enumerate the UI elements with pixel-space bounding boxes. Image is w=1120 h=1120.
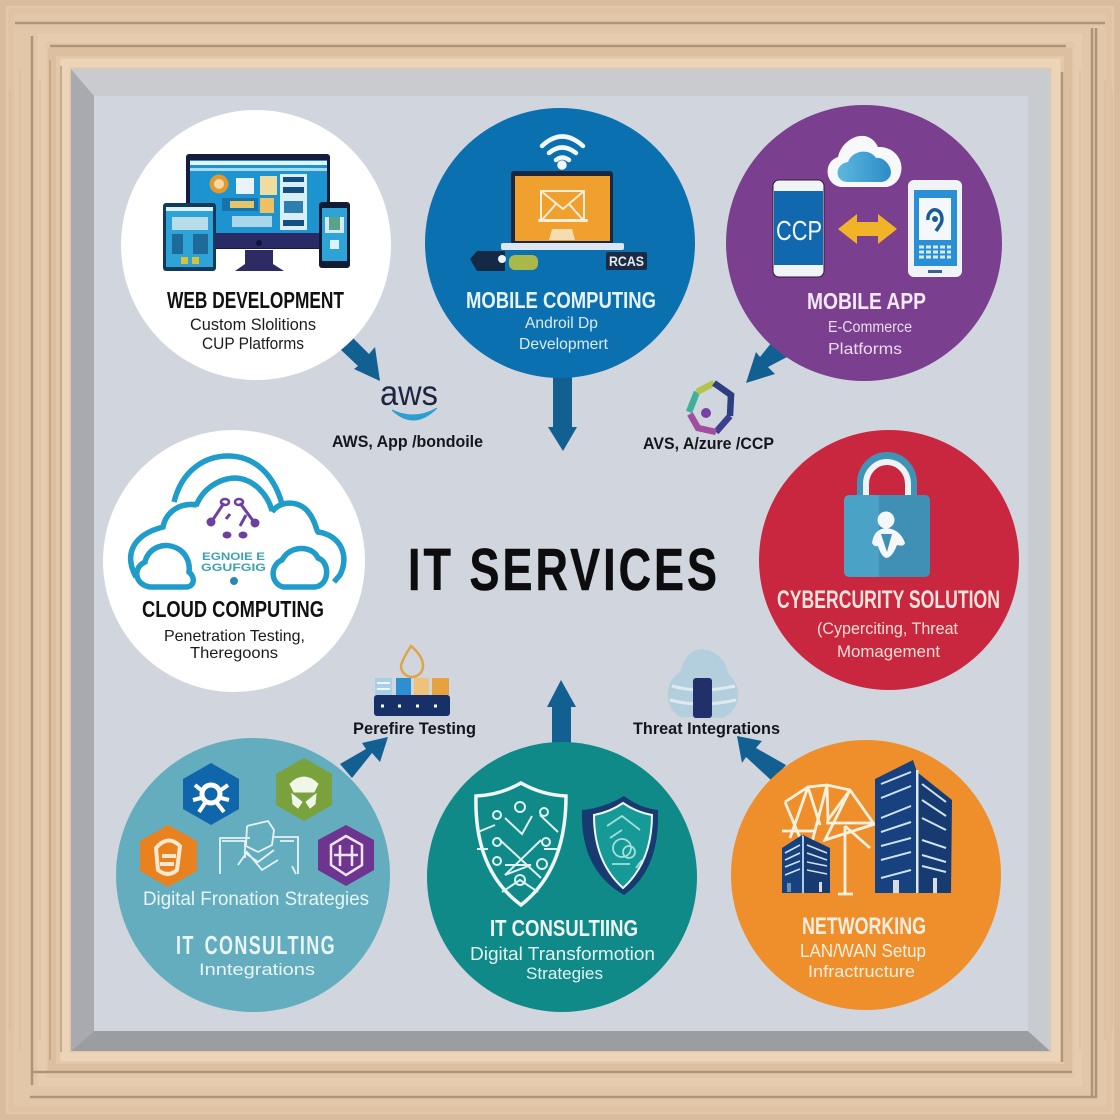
description line 2: Theregoons <box>190 645 278 662</box>
icon: laptop: RCAS <box>609 253 644 269</box>
heading: MOBILE COMPUTING <box>466 287 656 313</box>
description: Digital Transformotion <box>470 944 655 964</box>
description: Inntegrations <box>199 960 315 979</box>
arrow: web to aws <box>340 336 380 381</box>
arrow: mobile app to multicloud <box>746 342 787 383</box>
panel: mobile app <box>726 105 1002 381</box>
panel: it consulting teal <box>427 742 697 1012</box>
icon: tower <box>782 785 878 894</box>
icon: left phone: CCP <box>776 215 822 246</box>
icon: dot <box>230 577 238 585</box>
cloud label line 2: GGUFGIG <box>201 562 266 574</box>
icon: green hexagon <box>276 758 332 821</box>
heading: IT CONSULTIING <box>490 915 638 941</box>
icon: small building <box>782 835 830 893</box>
icon: left phone <box>773 180 824 277</box>
icon: orange hexagon <box>140 825 197 887</box>
description: LAN/WAN Setup <box>800 941 926 961</box>
description line 2: Momagement <box>837 642 940 661</box>
panel: it consulting light <box>116 738 390 1012</box>
logo: aws: aws <box>380 374 438 413</box>
label: integrations: Threat Integrations <box>633 719 780 738</box>
icon: cloud outline <box>131 456 344 587</box>
icon: cloud <box>828 136 901 187</box>
heading: IT CONSULTING <box>176 930 336 960</box>
arrow: teal up <box>547 680 576 745</box>
icon: white shield <box>476 783 566 905</box>
description: Custom Slolitions <box>190 315 316 334</box>
inner mat panel <box>71 69 1050 1051</box>
description line 2: Strategies <box>526 964 603 983</box>
icon: server cloud <box>668 649 738 718</box>
arrow: consulting to testing <box>340 737 388 778</box>
arrow: mobile computing down <box>548 376 577 451</box>
arrow: networking to integrations <box>737 736 786 781</box>
description: (Cyperciting, Threat <box>817 619 958 638</box>
description line 2: Infractructure <box>808 962 915 981</box>
icon: blue hexagon <box>183 763 239 825</box>
icon: laptop <box>470 171 647 271</box>
caption: Digital Fronation Strategies <box>143 889 369 910</box>
panel: web development <box>121 110 391 380</box>
icon: wifi <box>542 136 583 168</box>
description: Penetration Testing, <box>164 628 305 645</box>
title: IT SERVICES <box>408 537 720 603</box>
icon: navy shield <box>582 796 658 895</box>
icon: padlock <box>844 457 930 577</box>
panel: networking <box>731 740 1001 1010</box>
description line 2: Developmert <box>519 336 609 353</box>
label: aws: AWS, App /bondoile <box>332 432 483 451</box>
icon: multicloud hexagon <box>689 383 731 432</box>
cloud label: EGNOIE E <box>202 551 265 563</box>
icon: devices <box>163 154 350 271</box>
panel: cybersecurity <box>759 430 1019 690</box>
description: E-Commerce <box>828 319 912 336</box>
icon: right phone <box>908 180 962 277</box>
icon: double arrow <box>838 214 897 244</box>
heading: WEB DEVELOPMENT <box>167 287 344 313</box>
heading: CYBERCURITY SOLUTION <box>777 586 1000 614</box>
icon: server rack <box>374 646 450 716</box>
heading: CLOUD COMPUTING <box>142 596 324 622</box>
heading: MOBILE APP <box>807 288 926 314</box>
icon: purple hexagon <box>318 825 374 886</box>
description line 2: Platforms <box>828 341 902 358</box>
icon: tall building <box>875 760 952 893</box>
label: testing: Perefire Testing <box>353 719 476 738</box>
label: multicloud: AVS, A/zure /CCP <box>643 434 774 453</box>
panel: cloud computing <box>103 430 365 692</box>
heading: NETWORKING <box>802 913 926 940</box>
description line 2: CUP Platforms <box>202 334 304 353</box>
description: Androil Dp <box>525 315 598 332</box>
panel: mobile computing <box>425 108 695 378</box>
icon: central line art <box>220 821 298 874</box>
icon: network nodes <box>207 499 259 538</box>
